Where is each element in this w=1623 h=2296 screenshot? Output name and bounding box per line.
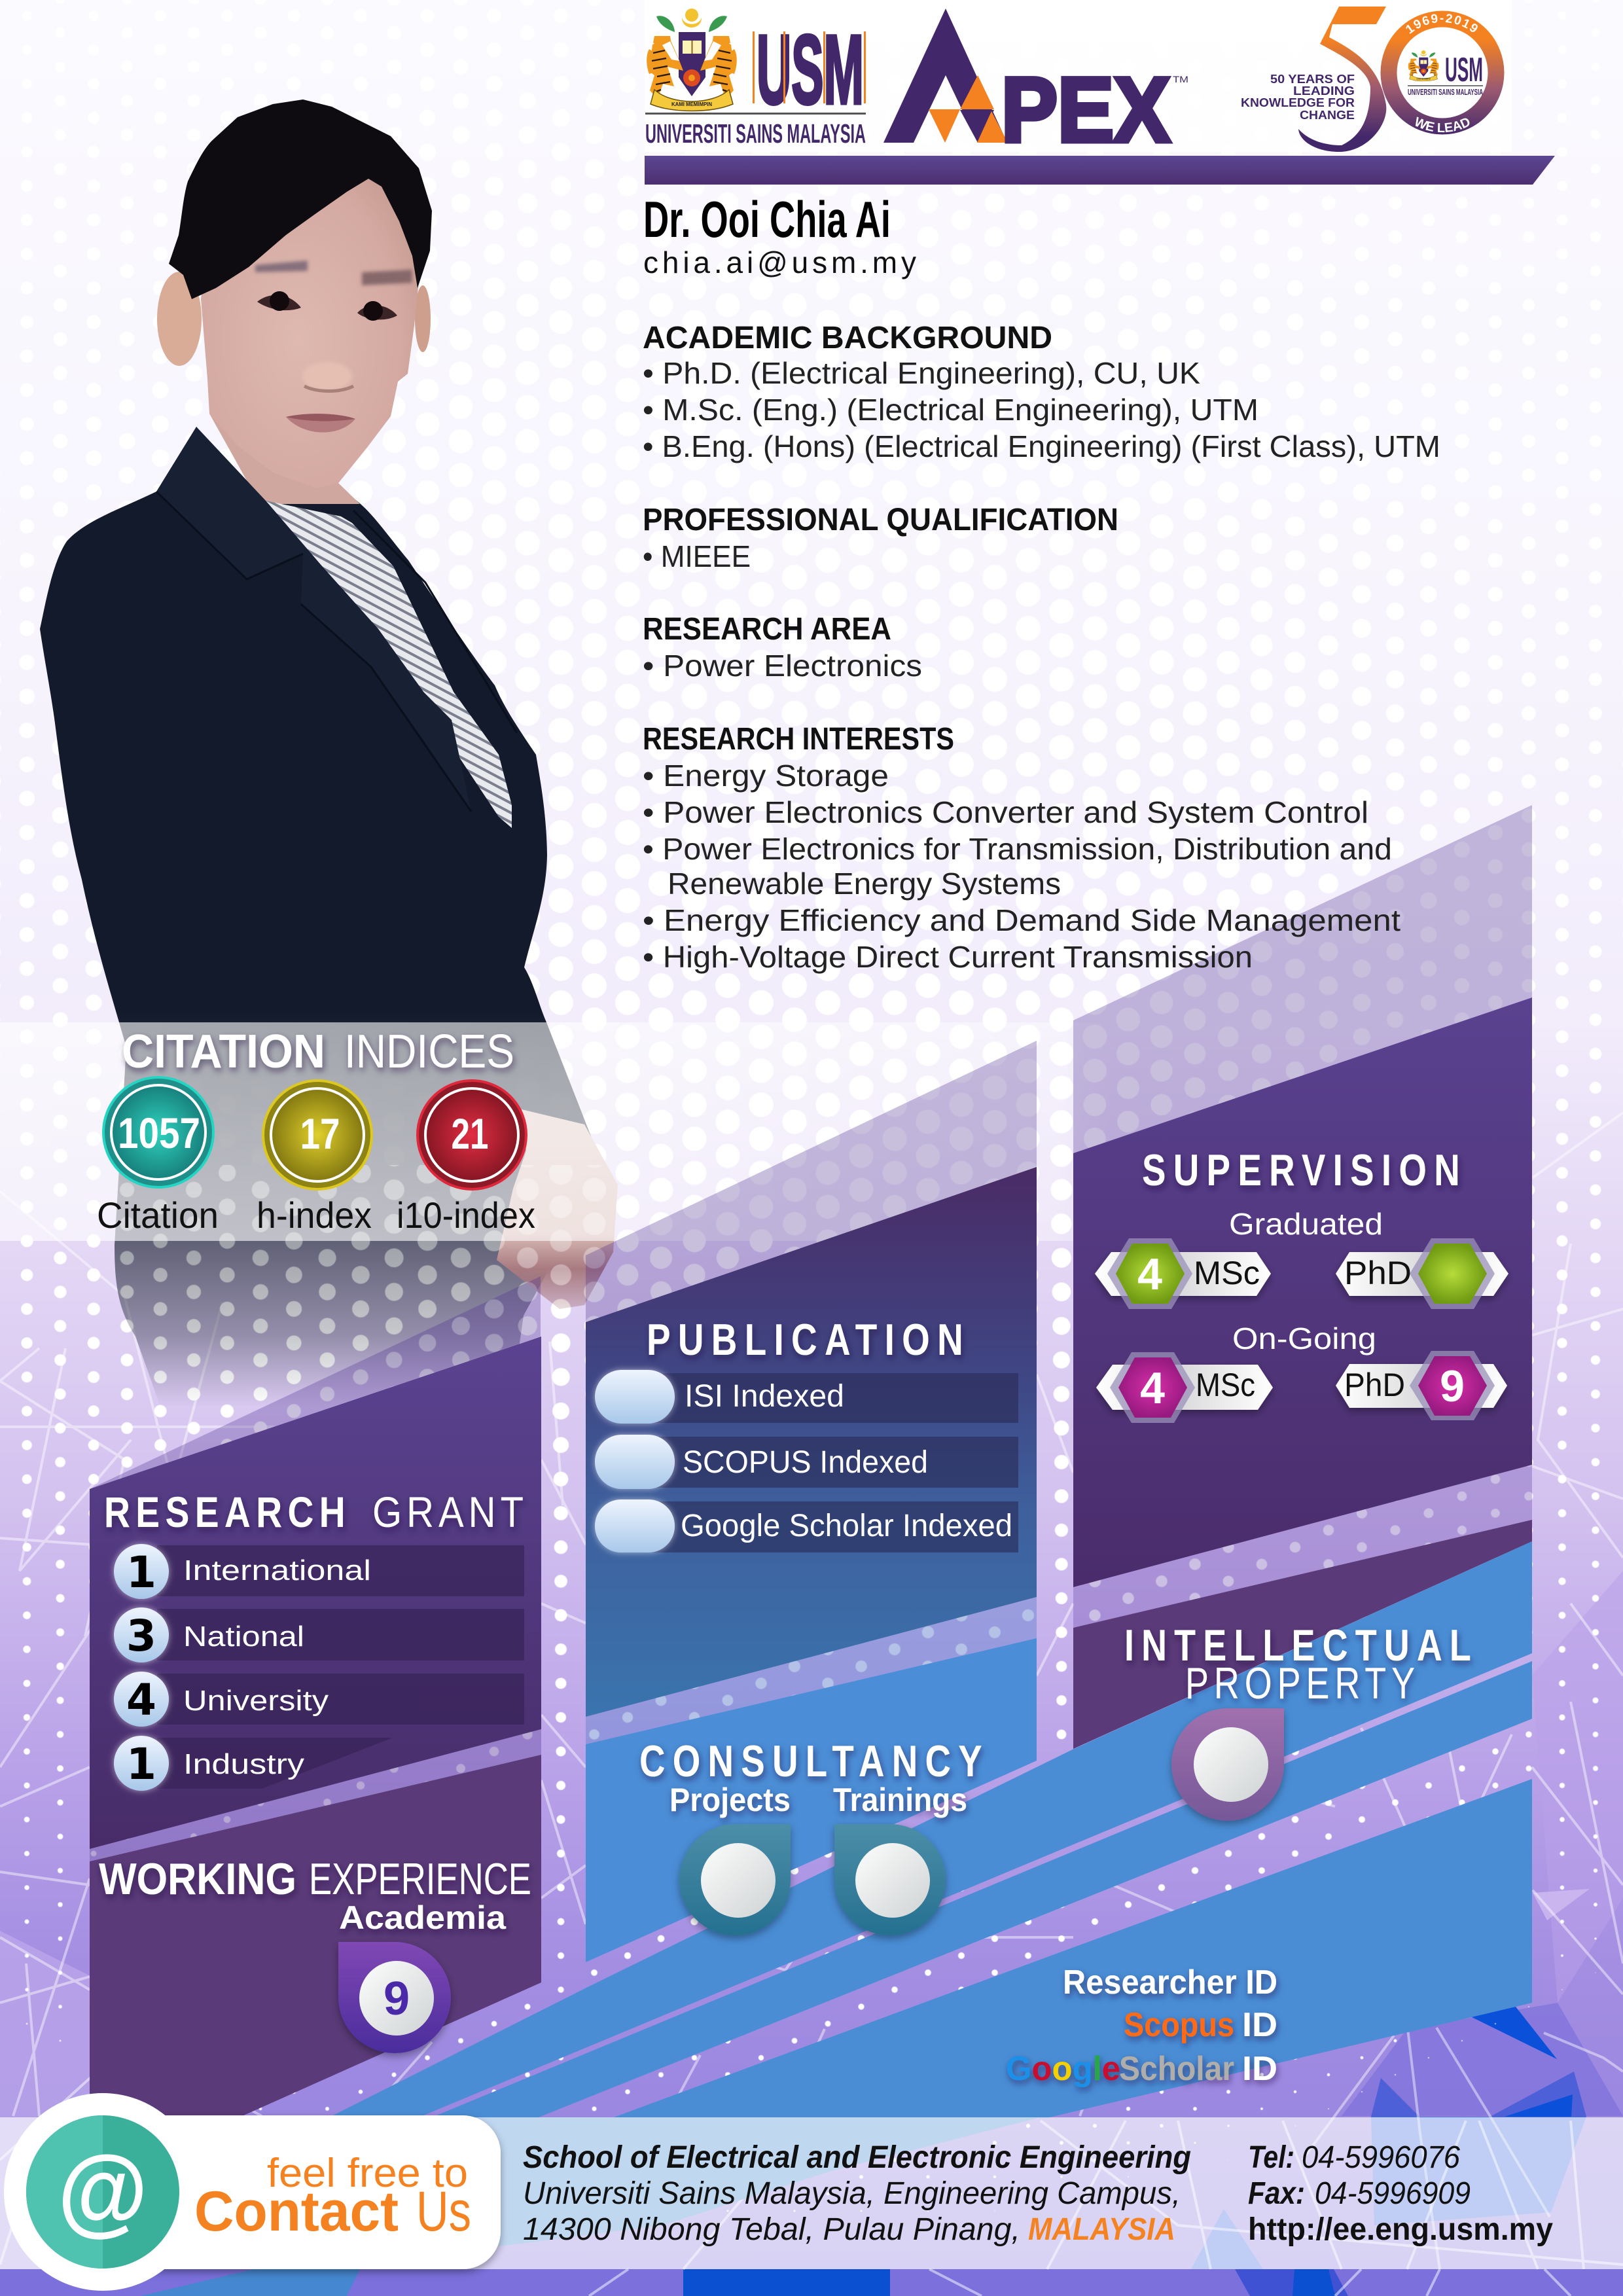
google scholar ID: Google [1006, 2050, 1120, 2088]
panel: intellectual property [1073, 1520, 1532, 1749]
scopus ID: ID [1242, 2006, 1277, 2044]
row: ISI indexed [595, 1370, 844, 1424]
graduated MSc: 4 [1137, 1249, 1162, 1299]
on-going PhD: 9 [1440, 1361, 1465, 1411]
label: trainings: Trainings [833, 1782, 967, 1818]
heading: research grant [104, 1488, 528, 1536]
google scholar ID: ID [1242, 2050, 1277, 2088]
section: research interests: • Energy Efficiency and Demand Side Management [643, 903, 1400, 937]
nose [302, 362, 352, 391]
translucent bar [0, 2117, 1623, 2269]
section: professional qualification [643, 503, 1118, 573]
right eye [357, 305, 397, 319]
publication content [595, 1315, 1018, 1552]
badge: trainings [834, 1824, 946, 1935]
panel: research ghost [90, 1276, 541, 1489]
panel: publication ghost [586, 1041, 1037, 1322]
logo: USM crest [647, 9, 737, 111]
researcher ID: Researcher ID [1063, 1964, 1277, 2001]
phone, fax, website [1248, 2140, 1553, 2247]
header logos [645, 7, 1504, 161]
heading: citation indices: INDICES [344, 1026, 514, 1078]
phone, fax, website: 04-5996909 [1315, 2176, 1471, 2211]
section: academic background: • Ph.D. (Electrical Engineering), CU, UK [643, 356, 1200, 390]
address: MALAYSIA [1028, 2212, 1175, 2247]
row: SCOPUS indexed [595, 1435, 928, 1489]
row: SCOPUS indexed: SCOPUS Indexed [683, 1445, 928, 1480]
jacket lapels [156, 427, 471, 812]
logo: 50 years: WE LEAD [1415, 117, 1470, 132]
contact heading: Contact [194, 2180, 399, 2243]
jacket [40, 427, 592, 1407]
logo: 50 years: USM [1445, 51, 1483, 89]
supervision content [1095, 1145, 1508, 1423]
badge: citation: 1057 [118, 1109, 200, 1157]
graduated MSc: MSc [1194, 1255, 1260, 1291]
heading: working experience [99, 1854, 531, 1936]
section: research area: RESEARCH AREA [643, 612, 891, 647]
subheading: on-going: On-Going [1232, 1321, 1376, 1355]
section: academic background: • M.Sc. (Eng.) (Electrical Engineering), UTM [643, 393, 1258, 427]
section: research interests: Renewable Energy Systems [668, 867, 1061, 901]
heading: citation indices [122, 1026, 514, 1078]
row: university: University [183, 1685, 329, 1717]
address: School of Electrical and Electronic Engineering [523, 2140, 1191, 2175]
logo: USM wordmark: USM [757, 14, 864, 124]
logo: APEX [883, 9, 1188, 161]
logo: APEX: PEX [1001, 58, 1170, 161]
section: academic background [643, 321, 1440, 463]
logo: 50 years: CHANGE [1300, 109, 1355, 122]
google scholar ID: Scholar [1119, 2050, 1234, 2088]
labels: h-index [257, 1194, 372, 1236]
badge: h-index [263, 1081, 372, 1189]
logo: 50 years [1241, 7, 1504, 152]
labels: Citation [97, 1194, 219, 1236]
icon: at sign: @ [58, 2135, 148, 2245]
section: research interests: • Energy Storage [643, 759, 889, 793]
logo: USM wordmark: UNIVERSITI SAINS MALAYSIA [645, 118, 866, 149]
logo: USM wordmark [645, 14, 866, 149]
panel: working experience [90, 1755, 541, 2116]
row: Google Scholar indexed: Google Scholar Indexed [681, 1509, 1012, 1543]
heading: publication: PUBLICATION [647, 1315, 971, 1365]
strip: between publication and consultancy [586, 1597, 1037, 1744]
section: research area [643, 612, 922, 683]
research grant content [104, 1488, 528, 1791]
section: research interests [643, 722, 1400, 974]
on-going MSc: 4 [1140, 1363, 1165, 1413]
badge: citation [103, 1077, 213, 1187]
citation translucent band [0, 1022, 1113, 1241]
phone, fax, website: 04-5996076 [1302, 2140, 1460, 2175]
heading: research grant: RESEARCH [104, 1488, 351, 1536]
graduated MSc [1095, 1238, 1271, 1309]
blue diagonal strips [329, 1541, 1532, 2118]
badge: intellectual property [1171, 1708, 1284, 1821]
row: international: 1 [126, 1547, 156, 1598]
section: professional qualification: • MIEEE [643, 539, 751, 573]
badge: i10-index: 21 [452, 1109, 488, 1158]
panel: supervision ghost [1073, 805, 1532, 1153]
contact white tab [92, 2115, 501, 2269]
panel: research grant [90, 1336, 541, 1849]
on-going MSc: MSc [1196, 1367, 1255, 1403]
row: ISI indexed: ISI Indexed [685, 1379, 844, 1414]
subheading: graduated: Graduated [1229, 1207, 1383, 1241]
lips [286, 414, 355, 433]
address: Universiti Sains Malaysia, Engineering Campus, [523, 2176, 1181, 2211]
labels [97, 1194, 535, 1236]
logo: 50 years: 1969-2019 [1406, 14, 1478, 34]
left ear [157, 272, 202, 366]
phone, fax, website: Tel: [1248, 2140, 1294, 2175]
row: international: International [183, 1554, 371, 1587]
on-going PhD: PhD [1344, 1367, 1405, 1403]
heading: intellectual property: INTELLECTUAL [1124, 1621, 1478, 1670]
consultancy content [639, 1736, 990, 1935]
phone, fax, website: http://ee.eng.usm.my [1248, 2212, 1553, 2247]
scopus ID: Scopus [1124, 2006, 1234, 2044]
icon: at sign [26, 2115, 179, 2269]
section: research interests: • Power Electronics for Transmission, Distribution and [643, 832, 1392, 866]
heading: intellectual property [1124, 1621, 1478, 1708]
header bar [645, 156, 1555, 185]
graduated PhD: PhD [1344, 1255, 1412, 1291]
logo: 50 years: LEADING [1293, 84, 1355, 98]
heading: supervision: SUPERVISION [1142, 1145, 1467, 1195]
google scholar ID [1006, 2050, 1277, 2088]
row: national: 3 [126, 1611, 156, 1661]
badge: h-index: 17 [300, 1109, 340, 1158]
eyes and brows [255, 260, 412, 433]
heading: consultancy: CONSULTANCY [639, 1736, 990, 1786]
section: research interests: • Power Electronics Converter and System Control [643, 795, 1368, 829]
logo: 50 years: 50 YEARS OF [1270, 73, 1355, 86]
on-going MSc [1096, 1352, 1273, 1423]
address: 14300 Nibong Tebal, Pulau Pinang, [523, 2212, 1020, 2247]
blue tint under bar [458, 2117, 1041, 2251]
striped blouse [266, 501, 512, 828]
hand [497, 1109, 618, 1309]
heading: working experience: EXPERIENCE [309, 1854, 531, 1904]
logo: 50 years: KNOWLEDGE FOR [1241, 96, 1355, 109]
labels: i10-index [397, 1194, 535, 1236]
panel: publication [586, 1167, 1037, 1717]
logo: APEX: TM [1173, 74, 1188, 84]
badge: academia years: 9 [383, 1973, 410, 2025]
row: national: National [183, 1621, 304, 1653]
row: industry [114, 1736, 304, 1791]
dots over lower photo [119, 1165, 606, 1390]
section: research area: • Power Electronics [643, 649, 922, 683]
white circle [4, 2093, 202, 2291]
panel: supervision [1073, 997, 1532, 1587]
heading: intellectual property: PROPERTY [1185, 1659, 1420, 1708]
contact heading: Us [416, 2180, 471, 2243]
intellectual property content [1124, 1621, 1478, 1821]
row: national [114, 1607, 304, 1662]
address [523, 2140, 1191, 2247]
brows [255, 260, 308, 272]
row: university: 4 [126, 1675, 156, 1725]
footer contact bar [0, 2093, 1623, 2291]
badge: i10-index [418, 1081, 526, 1189]
section: professional qualification: PROFESSIONAL QUALIFICATION [643, 503, 1118, 537]
right ear [415, 285, 431, 352]
heading: research grant: GRANT [372, 1488, 528, 1536]
working experience content [99, 1854, 531, 2053]
row: international [114, 1544, 371, 1599]
row bars [157, 1545, 524, 1789]
strip: between supervision and IP [1073, 1465, 1532, 1628]
heading: citation indices: CITATION [122, 1026, 325, 1078]
strip: between research and experience [90, 1729, 541, 1861]
section: academic background: ACADEMIC BACKGROUND [643, 321, 1052, 355]
citation indices [97, 1026, 535, 1236]
neck [209, 414, 368, 504]
heading: working experience: WORKING [99, 1854, 296, 1904]
contact heading: feel free to [267, 2151, 468, 2196]
logo: 50 years: UNIVERSITI SAINS MALAYSIA [1408, 87, 1483, 97]
heading: working experience: Academia [339, 1899, 507, 1936]
face [201, 157, 419, 488]
left eye [257, 295, 301, 310]
phone, fax, website: Fax: [1248, 2176, 1305, 2211]
row: Google Scholar indexed [595, 1499, 1012, 1552]
researcher IDs [1006, 1964, 1277, 2088]
graduated PhD [1336, 1238, 1508, 1309]
contact heading [194, 2151, 471, 2243]
profile text block [643, 190, 1440, 974]
row bars [635, 1373, 1018, 1552]
hair [169, 99, 432, 299]
section: research interests: • High-Voltage Direct Current Transmission [643, 940, 1253, 974]
portrait photo [40, 99, 618, 1407]
badge: projects [679, 1824, 791, 1935]
row: industry: Industry [183, 1748, 304, 1780]
badge: academia years [338, 1942, 451, 2053]
label: projects: Projects [669, 1782, 791, 1818]
on-going PhD [1336, 1351, 1507, 1420]
section: research interests: RESEARCH INTERESTS [643, 722, 954, 757]
email: chia.ai@usm.my [643, 245, 916, 279]
panel: consultancy [586, 1638, 1037, 1962]
row: university [114, 1672, 329, 1727]
name: Dr. Ooi Chia Ai [643, 190, 891, 248]
row: industry: 1 [126, 1739, 156, 1789]
section: academic background: • B.Eng. (Hons) (Electrical Engineering) (First Class), UTM [643, 429, 1440, 463]
